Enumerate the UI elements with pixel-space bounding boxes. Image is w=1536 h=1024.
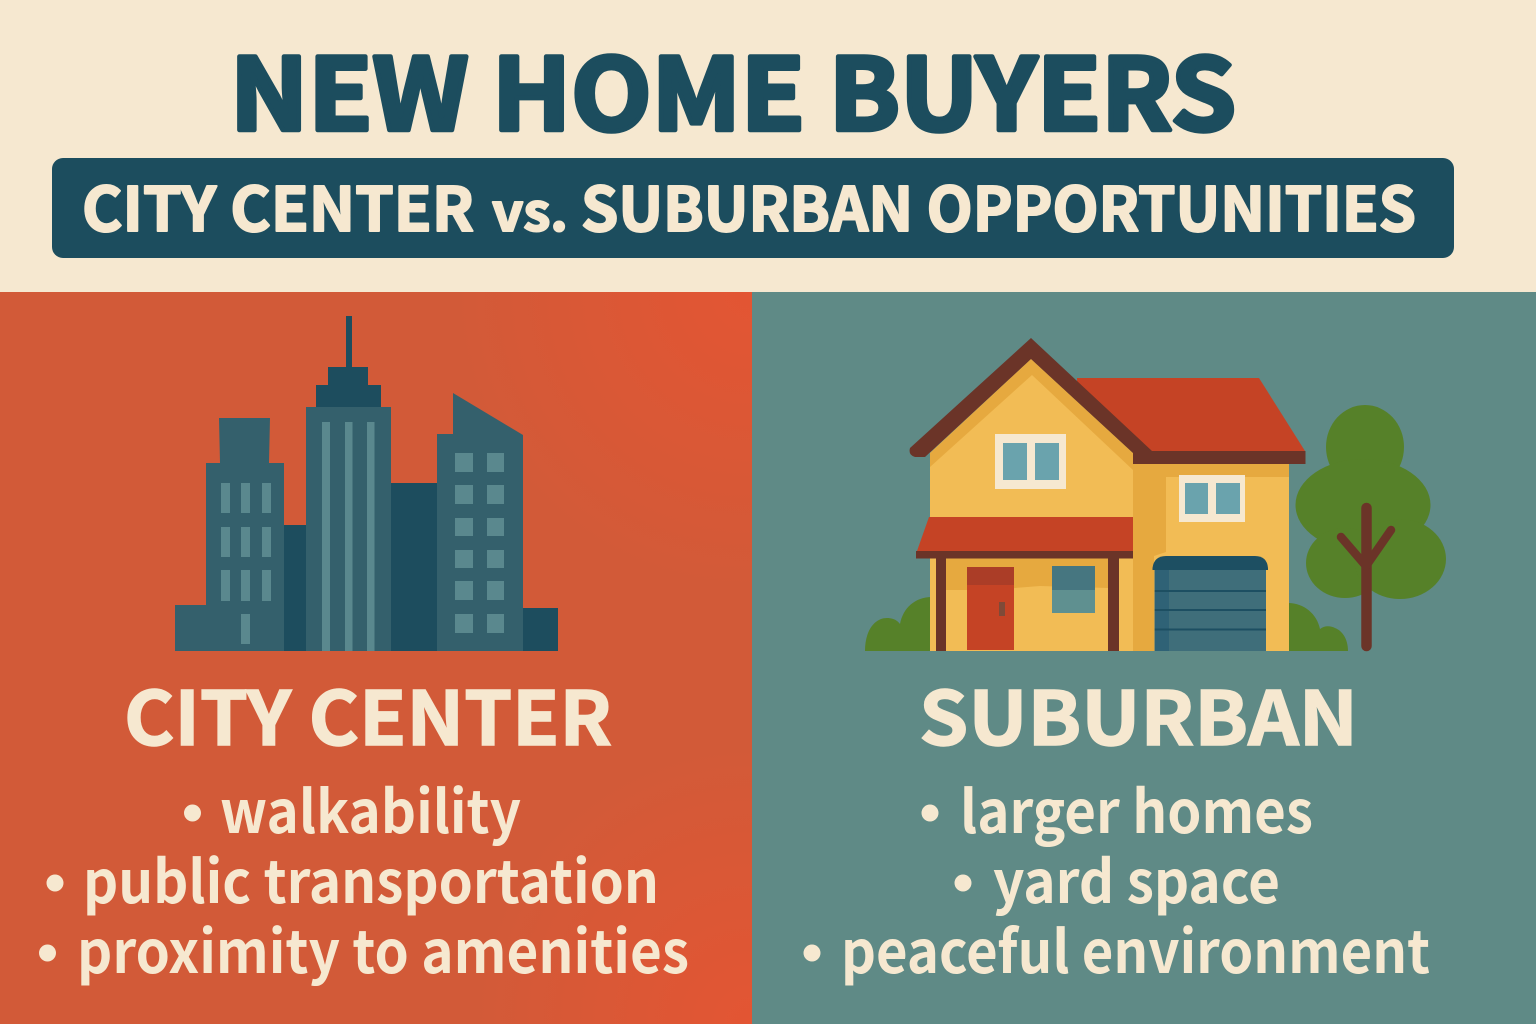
suburban panel background	[752, 292, 1536, 1024]
heading: suburban: SUBURBAN	[919, 660, 1358, 767]
icon: city skyline	[175, 316, 558, 651]
house walls	[930, 359, 1289, 651]
panel: suburban	[752, 292, 1536, 1024]
porch posts	[936, 558, 1119, 651]
header background	[0, 0, 1536, 292]
bullet: peaceful environment: peaceful environment	[841, 905, 1430, 990]
title: NEW HOME BUYERS	[230, 15, 1236, 159]
banner text: CITY CENTER	[82, 160, 474, 249]
upper window	[995, 434, 1066, 489]
bushes	[865, 597, 1348, 651]
banner text: vs.	[492, 171, 568, 246]
bullet: yard space: yard space	[993, 835, 1280, 920]
subtitle banner	[52, 158, 1454, 258]
bullet: public transportation: public transportation	[83, 835, 659, 920]
red main roof	[1077, 378, 1305, 453]
list: city center benefits	[39, 765, 689, 990]
bullet: larger homes: larger homes	[960, 765, 1313, 850]
icon: suburban house with tree	[865, 338, 1446, 651]
bullet: walkability: walkability	[220, 765, 521, 850]
bullet: proximity to amenities: proximity to amenities	[77, 905, 689, 990]
roof trim	[910, 338, 1306, 464]
list: suburban benefits	[804, 765, 1430, 990]
panel: city center	[0, 292, 752, 1024]
banner bar	[52, 158, 1454, 258]
heading: city center: CITY CENTER	[124, 660, 612, 767]
side window	[1179, 475, 1245, 522]
banner text: SUBURBAN OPPORTUNITIES	[581, 160, 1416, 249]
porch roof	[916, 517, 1133, 558]
porch window	[1052, 566, 1095, 613]
garage door	[1152, 556, 1268, 651]
front door	[967, 567, 1014, 650]
banner text	[82, 160, 1416, 249]
tree	[1296, 405, 1446, 646]
city panel background	[0, 292, 752, 1024]
